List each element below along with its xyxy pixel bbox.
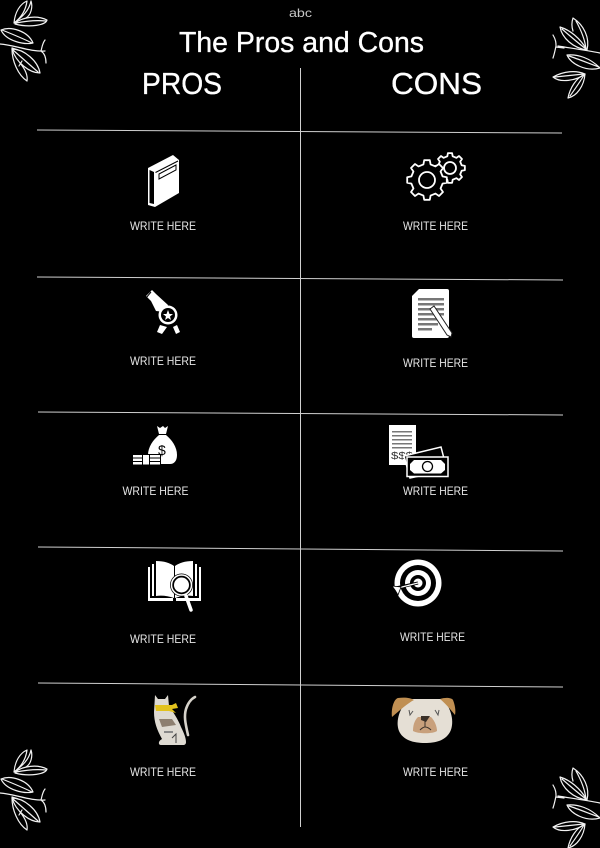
heading: cons: CONS <box>391 66 482 101</box>
icon: newspaper cat <box>154 695 195 745</box>
decoration: bottom-right leaves <box>553 768 600 848</box>
text: pros row 5: WRITE HERE <box>130 765 196 779</box>
text: cons row 3: WRITE HERE <box>403 484 468 498</box>
text: pros row 4: WRITE HERE <box>130 632 196 646</box>
text: cons row 1: WRITE HERE <box>403 219 468 233</box>
icon: receipt and banknotes: $$$ <box>391 451 414 462</box>
text: pros row 1: WRITE HERE <box>130 219 196 233</box>
decoration: top-right leaves <box>553 18 600 98</box>
decoration: top-left leaves <box>0 1 47 81</box>
text: pros row 2: WRITE HERE <box>130 354 196 368</box>
text: pros row 3: WRITE HERE <box>122 484 188 498</box>
text: cons row 5: WRITE HERE <box>403 765 468 779</box>
text: cons row 4: WRITE HERE <box>400 630 465 644</box>
decoration: bottom-left leaves <box>0 750 47 830</box>
icon: receipt and banknotes <box>389 425 448 478</box>
icon: gears <box>407 153 465 200</box>
icon: money bag <box>132 426 177 465</box>
title: The Pros and Cons <box>179 27 424 59</box>
icon: newspaper dog <box>392 698 455 743</box>
icon: document with pencil <box>412 289 452 338</box>
small label: abc: abc <box>289 6 312 20</box>
heading: pros: PROS <box>142 66 222 101</box>
icon: money bag: $ <box>158 442 166 458</box>
icon: open book with magnifier <box>148 561 201 610</box>
icon: hand with medal <box>146 290 180 334</box>
icon: target with arrow <box>392 560 442 606</box>
icon: book <box>148 155 179 207</box>
text: cons row 2: WRITE HERE <box>403 356 468 370</box>
